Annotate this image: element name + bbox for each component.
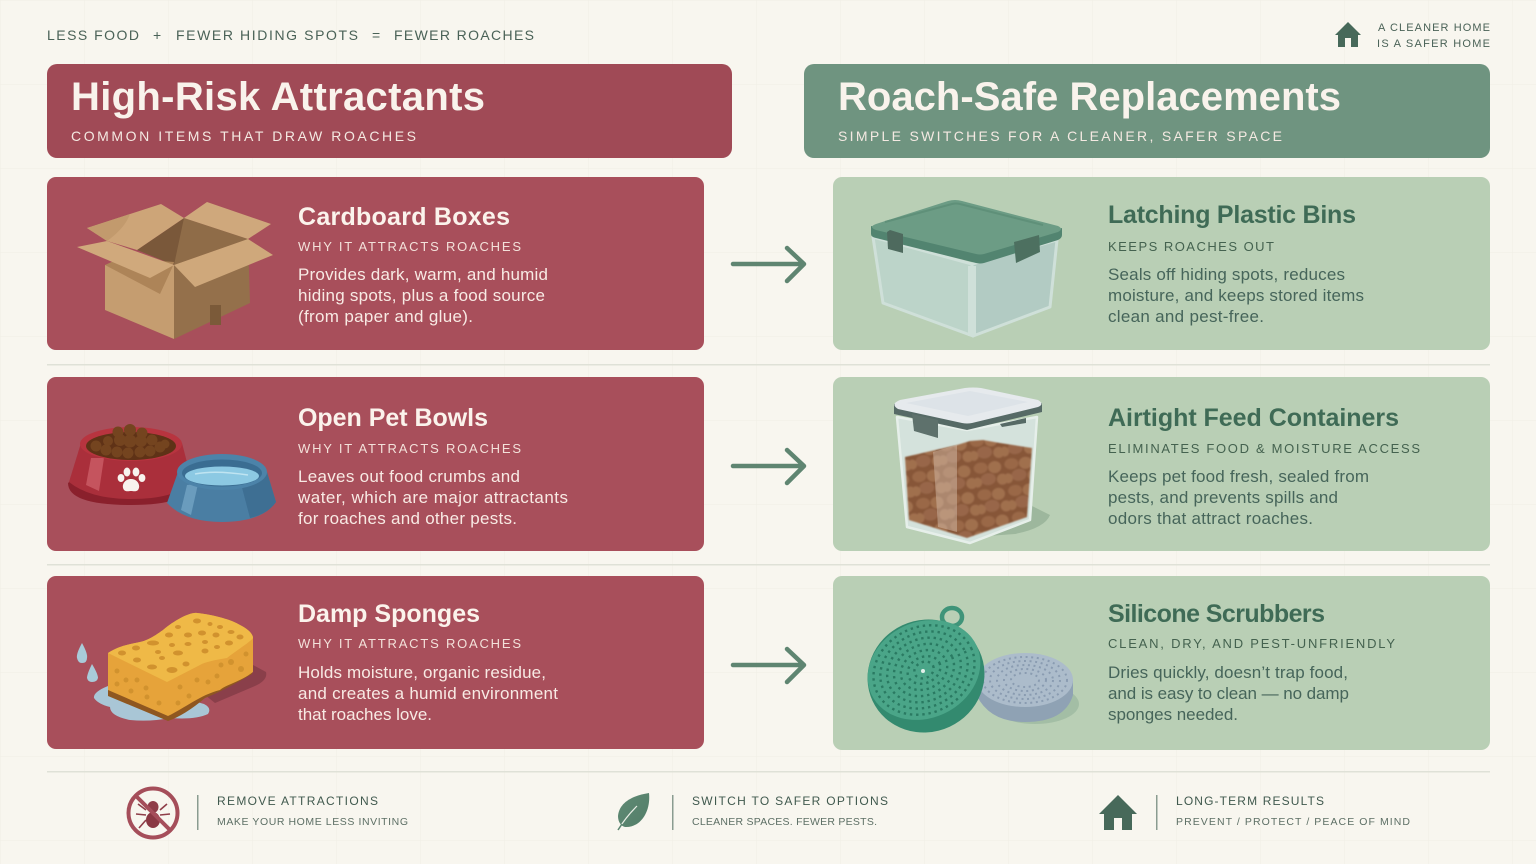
panel: damp sponges xyxy=(47,576,704,749)
card body: Holds moisture, organic residue, xyxy=(298,663,546,682)
card body xyxy=(1108,467,1369,528)
top right tagline xyxy=(1335,22,1490,50)
icon: open cardboard box xyxy=(77,202,273,339)
panel: replacements header xyxy=(804,64,1490,158)
top formula strip: FEWER ROACHES xyxy=(394,27,534,43)
card body: Keeps pet food fresh, sealed from xyxy=(1108,467,1369,486)
arrow 2 xyxy=(733,450,804,483)
panel: cardboard boxes xyxy=(47,177,704,350)
panel: silicone scrubbers xyxy=(833,576,1490,752)
top formula strip: LESS FOOD xyxy=(47,27,139,43)
card body: that roaches love. xyxy=(298,705,432,724)
top formula strip: = xyxy=(372,27,380,43)
footer text xyxy=(692,794,888,828)
red food bowl xyxy=(68,424,192,505)
card label: ELIMINATES FOOD & MOISTURE ACCESS xyxy=(1108,441,1420,456)
icon: silicone scrubbers xyxy=(849,600,1079,752)
card body: Seals off hiding spots, reduces xyxy=(1108,265,1345,284)
card label: CLEAN, DRY, AND PEST-UNFRIENDLY xyxy=(1108,636,1395,651)
card body: sponges needed. xyxy=(1108,705,1238,724)
card body: Provides dark, warm, and humid xyxy=(298,265,548,284)
icon: house xyxy=(1099,795,1137,830)
card label: WHY IT ATTRACTS ROACHES xyxy=(298,636,521,651)
card label: KEEPS ROACHES OUT xyxy=(1108,239,1274,254)
tagline text: A CLEANER HOME xyxy=(1378,22,1490,34)
icon: latching bin xyxy=(871,200,1062,336)
card body: (from paper and glue). xyxy=(298,307,473,326)
card body: hiding spots, plus a food source xyxy=(298,286,545,305)
card body: and is easy to clean — no damp xyxy=(1108,684,1349,703)
tagline text xyxy=(1377,22,1490,50)
card title: Cardboard Boxes xyxy=(298,203,510,231)
card title: Silicone Scrubbers xyxy=(1108,600,1325,628)
card body: water, which are major attractants xyxy=(297,488,568,507)
footer text: SWITCH TO SAFER OPTIONS xyxy=(692,794,888,808)
top formula strip: + xyxy=(153,27,161,43)
card body xyxy=(297,467,568,528)
card body xyxy=(298,265,548,326)
card body: pests, and prevents spills and xyxy=(1108,488,1338,507)
icon: damp sponge xyxy=(77,613,266,721)
icon: no roaches xyxy=(128,788,178,838)
grey scrubber xyxy=(977,653,1073,722)
icon: feed container xyxy=(894,388,1050,543)
heading: roach-safe replacements: Roach-Safe Replacements xyxy=(838,75,1341,119)
card body: odors that attract roaches. xyxy=(1108,509,1313,528)
panel: open pet bowls xyxy=(47,377,704,551)
card body: clean and pest-free. xyxy=(1108,307,1264,326)
heading: high-risk attractants: High-Risk Attractants xyxy=(71,75,485,119)
card body: Dries quickly, doesn’t trap food, xyxy=(1108,663,1348,682)
footer text: CLEANER SPACES. FEWER PESTS. xyxy=(692,816,877,828)
footer item: remove attractions xyxy=(128,788,408,838)
card label: WHY IT ATTRACTS ROACHES xyxy=(298,239,521,254)
card body: and creates a humid environment xyxy=(298,684,558,703)
subheading: simple switches: SIMPLE SWITCHES FOR A CLEANER, SAFER SPACE xyxy=(838,128,1282,144)
card body: Leaves out food crumbs and xyxy=(298,467,520,486)
icon: pet bowls xyxy=(68,424,276,522)
footer item: switch to safer options xyxy=(618,793,888,830)
panel: high-risk header xyxy=(47,64,732,158)
card body xyxy=(1108,265,1364,326)
panel: latching plastic bins xyxy=(833,177,1490,350)
card body: moisture, and keeps stored items xyxy=(1108,286,1364,305)
card title: Latching Plastic Bins xyxy=(1108,201,1356,229)
card body xyxy=(1108,663,1349,724)
arrow 3 xyxy=(733,649,804,682)
subheading: common items: COMMON ITEMS THAT DRAW ROACHES xyxy=(71,128,416,144)
card title: Damp Sponges xyxy=(298,600,480,628)
icon: leaf xyxy=(618,793,649,830)
top formula strip xyxy=(47,27,534,43)
footer text xyxy=(217,794,408,828)
green scrubber xyxy=(849,600,1003,752)
card title: Airtight Feed Containers xyxy=(1108,404,1399,432)
card body xyxy=(298,663,558,724)
footer text: PREVENT / PROTECT / PEACE OF MIND xyxy=(1176,816,1410,828)
card title: Open Pet Bowls xyxy=(298,404,488,432)
card body: for roaches and other pests. xyxy=(298,509,517,528)
footer text: REMOVE ATTRACTIONS xyxy=(217,794,378,808)
card label: WHY IT ATTRACTS ROACHES xyxy=(298,441,521,456)
icon: paw print xyxy=(118,468,145,491)
footer text: MAKE YOUR HOME LESS INVITING xyxy=(217,816,408,828)
footer text xyxy=(1176,794,1410,828)
blue water bowl xyxy=(167,454,276,522)
tagline text: IS A SAFER HOME xyxy=(1377,38,1490,50)
footer text: LONG-TERM RESULTS xyxy=(1176,794,1324,808)
panel: airtight feed containers xyxy=(833,377,1490,551)
footer item: long-term results xyxy=(1099,794,1410,830)
arrow 1 xyxy=(733,248,804,281)
top formula strip: FEWER HIDING SPOTS xyxy=(176,27,358,43)
icon: house xyxy=(1335,22,1361,47)
